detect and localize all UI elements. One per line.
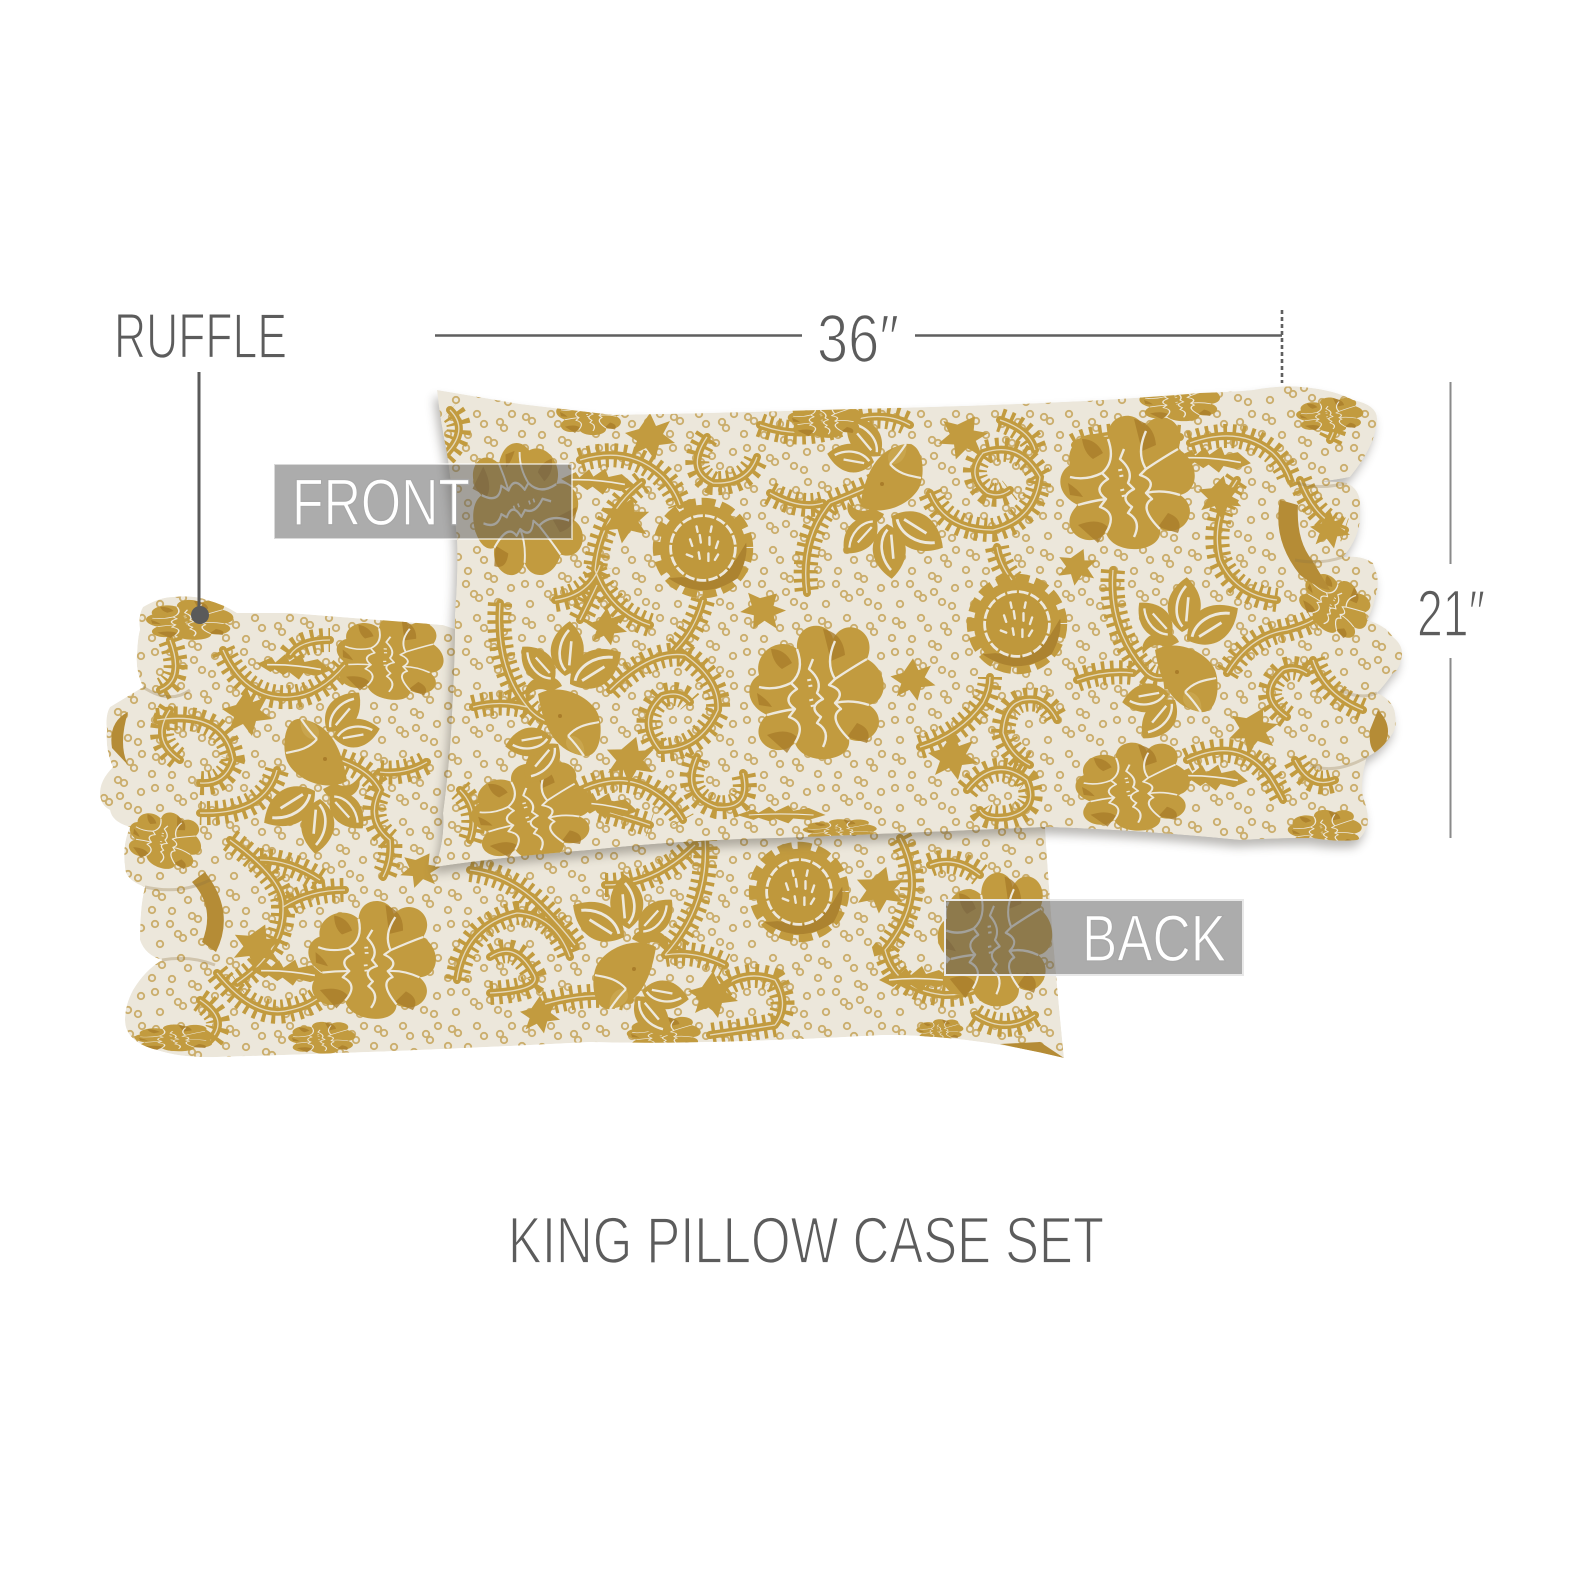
height dimension: 21 inches: 21″ — [1417, 576, 1485, 650]
ruffle leader line with dot — [191, 372, 209, 624]
label: BACK: BACK — [1082, 901, 1226, 975]
label: BACK — [945, 900, 1243, 975]
pillow: back view with ruffle — [100, 596, 1064, 1058]
label: RUFFLE: RUFFLE — [114, 300, 287, 372]
width dimension: 36 inches: 36″ — [817, 301, 899, 377]
pillow: front view with ruffle — [435, 378, 1402, 867]
label: FRONT: FRONT — [292, 465, 470, 539]
caption: KING PILLOW CASE SET — [508, 1203, 1104, 1277]
front pillow shadow — [432, 393, 1399, 874]
